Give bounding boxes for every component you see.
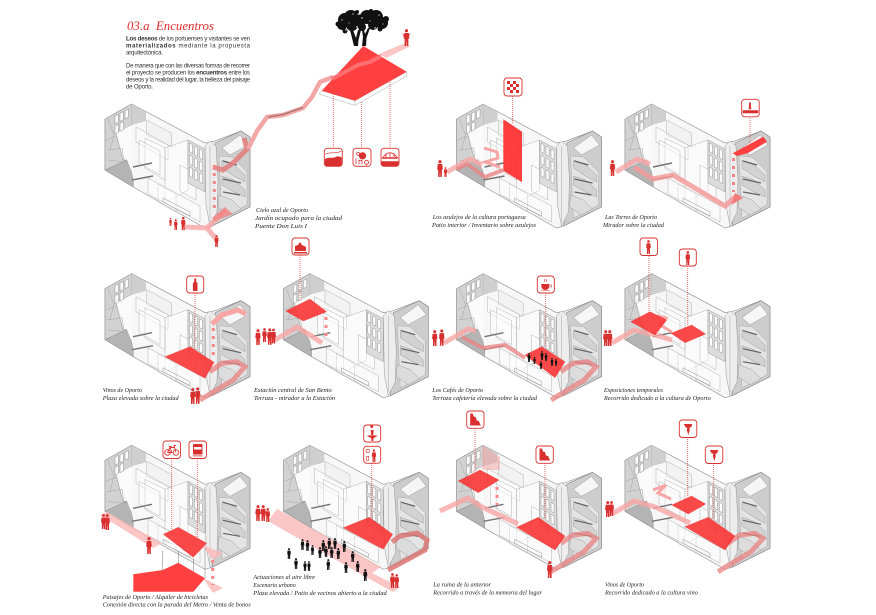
crowd — [287, 538, 367, 581]
figure — [547, 561, 553, 578]
caption: Los azulejos de la cultura portuguesa — [432, 214, 526, 221]
icon: tiles — [504, 78, 522, 96]
red lower plan — [133, 563, 205, 592]
connecting lines — [163, 548, 205, 591]
figures — [605, 501, 614, 517]
caption: Actuaciones al aire libre — [252, 574, 315, 581]
building — [456, 104, 602, 228]
icon: towers — [742, 99, 759, 117]
figures — [190, 387, 200, 404]
building — [625, 274, 770, 398]
caption — [604, 581, 698, 596]
building — [283, 445, 428, 569]
dashed line — [545, 293, 547, 347]
panel: paisajes de Oporto — [100, 441, 251, 609]
caption: Plaza elevada sobre la ciudad — [102, 395, 179, 402]
building — [625, 445, 770, 569]
caption — [102, 387, 179, 402]
caption: Escenario urbano — [252, 582, 296, 589]
icon: ruin — [467, 411, 484, 428]
dashed lines — [734, 116, 750, 192]
intro text: materializados mediante la propuesta — [126, 42, 251, 49]
intro text: Los deseos de los portuenses y visitantes se ven — [126, 35, 250, 42]
pink routes — [444, 329, 596, 400]
icon: grapes — [705, 446, 723, 464]
caption: Vinos de Oporto — [605, 581, 645, 588]
building — [283, 274, 428, 398]
icon: bottle — [187, 276, 204, 293]
red platforms — [672, 496, 735, 550]
building — [105, 445, 250, 569]
caption: Las Torres de Oporto — [604, 214, 658, 221]
dashed lines — [300, 255, 326, 340]
red terrace — [525, 347, 565, 378]
panel: vinos, cultura del vino — [604, 420, 770, 596]
pink wash on back wall — [482, 445, 500, 470]
figures — [169, 217, 218, 247]
panel: los azulejos — [431, 78, 602, 229]
icon: landscape — [324, 148, 342, 166]
building — [105, 274, 250, 398]
pink routes — [200, 310, 246, 400]
panel: estación San Bento — [253, 238, 428, 402]
red wall panel — [503, 119, 522, 182]
dashed lines to icons — [333, 82, 390, 148]
pink route — [616, 159, 743, 206]
dashed line — [194, 293, 196, 350]
title: 03.a Encuentros — [127, 19, 214, 33]
intro text: el proyecto se producen los encuentros entre los — [126, 70, 250, 77]
dashed lines — [475, 428, 545, 518]
pink routes — [612, 316, 672, 343]
caption: La ruina de la anterior — [432, 581, 491, 588]
intro text: arquitectónica. — [126, 49, 163, 56]
icon: ruin — [536, 446, 553, 463]
panel: actuaciones al aire libre — [252, 425, 428, 597]
caption: Cielo azul de Oporto — [256, 207, 309, 214]
tree — [336, 9, 389, 46]
icon: metro — [189, 441, 206, 458]
figure — [610, 160, 615, 176]
caption: Jardín ocupado para la ciudad — [255, 215, 343, 222]
panel: cielo azul de Oporto — [105, 9, 411, 247]
figure on roof — [402, 29, 411, 46]
caption: Plaza elevada / Patio de vecinos abierto a la ciudad — [252, 590, 387, 597]
building — [105, 104, 250, 228]
caption: Terraza - mirador a la Estación — [254, 395, 336, 402]
caption — [602, 214, 665, 229]
dashed lines — [172, 458, 197, 540]
caption: Estación central de San Bento — [253, 387, 332, 394]
red upper platform — [163, 527, 207, 557]
panel: vinos de Oporto — [102, 274, 250, 404]
building — [456, 274, 602, 398]
figures — [255, 505, 399, 588]
pink route — [100, 512, 223, 593]
panel: la ruina — [432, 411, 602, 596]
icon: visitor — [640, 238, 658, 256]
red terrace — [286, 299, 327, 321]
icon: bicycle — [163, 441, 180, 458]
icon: station — [292, 238, 309, 255]
caption: Recorrido dedicado a la cultura de Oporto — [603, 395, 711, 402]
caption — [431, 214, 536, 229]
figures — [437, 160, 447, 177]
icon: musician — [364, 446, 381, 463]
dashed lines — [688, 437, 714, 518]
caption: Terraza cafetería elevada sobre la ciudad — [432, 395, 538, 402]
caption: Recorrido dedicado a la cultura vino — [604, 589, 698, 596]
figures — [432, 329, 444, 346]
pink street — [268, 509, 400, 592]
panel: las torres — [602, 99, 770, 229]
red platforms — [631, 312, 706, 343]
pink route to the roof — [185, 77, 333, 240]
pink route — [273, 327, 322, 343]
red roof — [319, 46, 407, 106]
dashed line — [371, 463, 373, 520]
icon: grapes — [679, 420, 697, 438]
caption: Paisajes de Oporto / Alquiler de bicicletas — [102, 594, 208, 601]
pink route to figure — [379, 43, 410, 58]
building — [625, 104, 770, 228]
caption: Puente Don Luis I — [254, 223, 308, 230]
building — [456, 445, 602, 569]
pink routes — [612, 485, 763, 572]
red plaza — [165, 347, 214, 378]
caption: Conexión directa con la parada del Metro / Venta de bonos — [103, 602, 251, 609]
icon: bridge — [381, 148, 399, 166]
panel: los cafés — [431, 274, 602, 402]
red ring route — [388, 533, 427, 570]
caption — [603, 387, 711, 402]
caption — [102, 594, 251, 609]
café tables — [528, 351, 557, 369]
icon: garden — [353, 148, 371, 166]
red ground triangle — [212, 207, 233, 221]
icon: ballet dancer — [364, 425, 381, 442]
intro text: deseos y la realidad del lugar, la belleza del paisaje — [126, 77, 251, 84]
pink routes — [447, 148, 503, 177]
icon: coffee cup — [537, 276, 554, 293]
intro text — [126, 35, 251, 91]
dashed stair route — [213, 165, 216, 213]
panel: exposiciones temporales — [603, 238, 770, 402]
red platforms — [458, 470, 565, 550]
caption: Vinos de Oporto — [103, 387, 143, 394]
dashed lines — [649, 256, 688, 326]
intro text: de Oporto. — [126, 84, 153, 91]
caption: Mirador sobre la ciudad — [602, 222, 665, 229]
caption — [431, 387, 538, 402]
caption — [254, 207, 343, 230]
figures — [101, 514, 152, 554]
icon: visitor — [679, 249, 696, 266]
caption: Exposiciones temporales — [603, 387, 663, 394]
intro text: De manera que con las diversas formas de recorrer — [126, 63, 250, 70]
figures — [603, 330, 612, 346]
caption — [253, 387, 336, 402]
caption: Los Cafés de Oporto — [431, 387, 484, 394]
caption — [252, 574, 387, 597]
caption: Patio interior / Inventario sobre azulejos — [431, 222, 536, 229]
dashed line — [512, 96, 514, 124]
caption — [432, 581, 542, 596]
figures — [255, 328, 276, 345]
red plaza — [343, 517, 393, 549]
red roof — [733, 137, 767, 156]
caption: Recorrido a través de la memoria del lugar — [432, 589, 542, 596]
pink routes — [440, 487, 596, 572]
